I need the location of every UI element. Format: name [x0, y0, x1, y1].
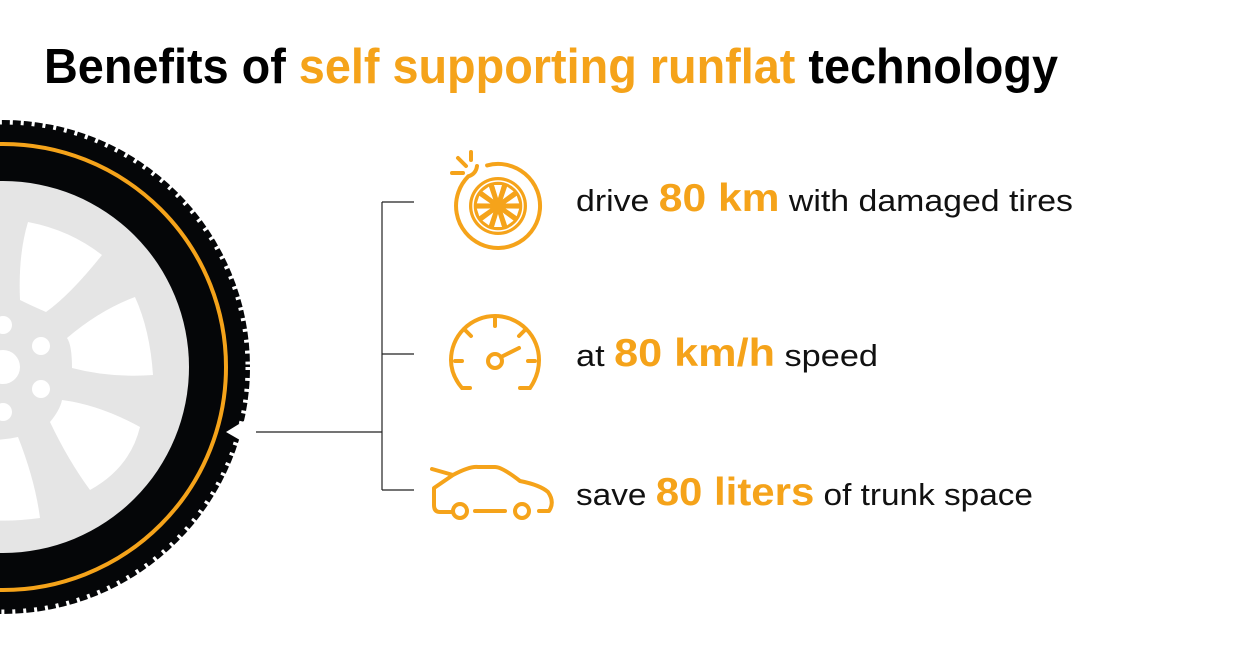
- text: 80 km/h speed: at 80 km/h speed: [576, 332, 878, 375]
- text: 80 liters: save 80 liters of trunk space: [576, 471, 1033, 514]
- wheel spokes cutouts: [0, 222, 153, 521]
- icon: damaged wheel: [452, 152, 540, 248]
- icon: speedometer: [451, 316, 539, 388]
- tire damage notch: [226, 416, 252, 447]
- text: drive 80 km: drive 80 km with damaged tires: [576, 177, 1073, 220]
- icon: car with open trunk: [432, 467, 552, 518]
- title: Benefits of self supporting runflat technology: [44, 40, 1058, 94]
- connector lines: [256, 202, 414, 490]
- illustration: tire: [0, 120, 252, 614]
